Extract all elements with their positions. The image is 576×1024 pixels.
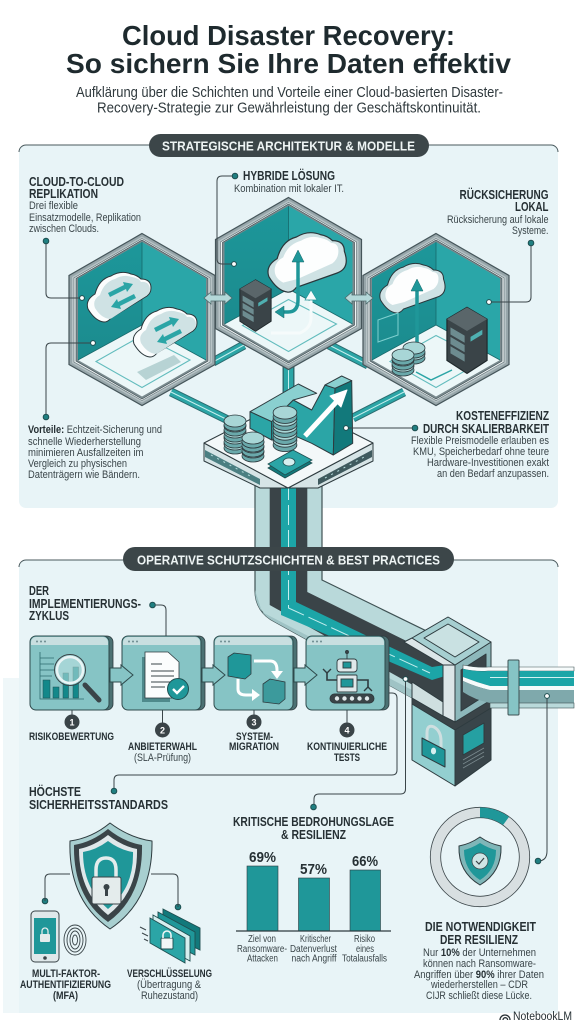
step number badges: 3 xyxy=(251,718,257,728)
heading: threat situation xyxy=(233,815,394,842)
step number badges xyxy=(64,714,354,738)
heading: threat situation: KRITISCHE BEDROHUNGSLAGE xyxy=(233,815,394,829)
bar chart: eines xyxy=(356,944,374,955)
data conduit pipe xyxy=(255,480,450,716)
junction box xyxy=(404,617,491,730)
text: advantages: Vergleich zu physischen xyxy=(28,458,127,470)
step 4: continuous tests robot xyxy=(306,636,389,710)
shield connector lines xyxy=(45,874,178,907)
text: hybrid: Kombination mit lokaler IT. xyxy=(234,183,344,195)
text: cost efficiency: Flexible Preismodelle erlauben es xyxy=(411,435,550,447)
title xyxy=(66,20,512,79)
bar chart: nach Angriff xyxy=(292,954,337,964)
step labels: SYSTEM- xyxy=(236,731,273,743)
heading: security standards xyxy=(29,784,168,812)
text: advantages: schnelle Wiederherstellung xyxy=(28,436,141,448)
subtitle xyxy=(76,85,503,116)
step labels: (SLA-Prüfung) xyxy=(134,752,191,764)
icon: small shield xyxy=(459,837,501,885)
subtitle: Recovery-Strategie zur Gewährleistung der Geschäftskontinuität. xyxy=(97,100,481,116)
text: cloud-to-cloud: Drei flexible xyxy=(29,200,78,212)
step labels: ANBIETERWAHL xyxy=(128,741,197,753)
text: cloud-to-cloud: zwischen Clouds. xyxy=(29,223,99,235)
section header: strategic xyxy=(149,134,429,157)
heading: threat situation: & RESILIENZ xyxy=(281,828,346,842)
text: need for resilience: DER RESILIENZ xyxy=(440,932,518,947)
heading: security standards: SICHERHEITSSTANDARDS xyxy=(29,798,168,812)
labels: MFA: (MFA) xyxy=(53,990,78,1002)
text: advantages xyxy=(28,424,162,481)
step labels: KONTINUIERLICHE xyxy=(307,741,387,753)
title: Cloud Disaster Recovery: xyxy=(122,20,455,51)
step arrows xyxy=(110,665,317,685)
bar chart: Datenverlust xyxy=(290,944,337,955)
donut chart 10 percent xyxy=(430,807,530,907)
scaling chart block xyxy=(250,376,353,455)
hexagon: hybrid xyxy=(216,198,362,370)
step number badges: 1 xyxy=(69,718,75,728)
section header: operative: OPERATIVE SCHUTZSCHICHTEN & BEST PRACTICES xyxy=(137,552,440,568)
heading: security standards: HÖCHSTE xyxy=(29,784,81,799)
text: cost efficiency: KOSTENEFFIZIENZ xyxy=(456,409,549,423)
text: cost efficiency: Hardware-Investitionen exakt xyxy=(427,457,549,469)
bar chart: Risiko xyxy=(354,934,375,945)
text: need for resilience: können nach Ransomware- xyxy=(423,958,536,970)
heading: implementation cycle xyxy=(29,584,141,623)
callout dots lower panel xyxy=(42,602,549,910)
connector beams to platform xyxy=(171,345,404,420)
callout lines upper panel xyxy=(46,176,531,428)
panel: operative protection xyxy=(19,560,558,1013)
step number badges: 4 xyxy=(344,726,350,736)
text: cloud-to-cloud: Einsatzmodelle, Replikation xyxy=(29,212,141,224)
panel: strategic architecture xyxy=(19,145,558,508)
hexagon: cloud-to-cloud xyxy=(69,234,215,406)
data stacks xyxy=(224,406,297,462)
bar chart xyxy=(236,849,391,964)
text: hybrid xyxy=(234,168,344,195)
hexagon: local restore xyxy=(363,234,509,406)
text: need for resilience: CIJR schließt diese Lücke. xyxy=(426,990,532,1002)
subtitle: Aufklärung über die Schichten und Vorteile einer Cloud-basierten Disaster- xyxy=(76,85,503,101)
text: cloud-to-cloud: CLOUD-TO-CLOUD xyxy=(29,175,124,189)
text: need for resilience: DIE NOTWENDIGKEIT xyxy=(425,919,536,934)
bar chart: 66% xyxy=(352,853,378,870)
panel border lines xyxy=(19,145,558,567)
icon: phone with fingerprint xyxy=(31,911,86,962)
text: cost efficiency: an den Bedarf anzupassen. xyxy=(437,468,549,480)
step number badges: 2 xyxy=(160,726,165,736)
title: So sichern Sie Ihre Daten effektiv xyxy=(66,48,512,79)
text: advantages: Datenträgern wie Bändern. xyxy=(28,469,140,481)
text: local restore: RÜCKSICHERUNG xyxy=(460,187,548,202)
step labels: MIGRATION xyxy=(229,741,279,753)
step 3: system migration xyxy=(214,636,297,710)
labels: encryption xyxy=(127,967,212,1002)
central platform xyxy=(204,400,373,488)
callout lines lower panel xyxy=(72,605,547,861)
text: hybrid: HYBRIDE LÖSUNG xyxy=(243,168,335,183)
text: advantages: Vorteile: Echtzeit-Sicherung und xyxy=(28,424,162,436)
step cards xyxy=(30,636,389,710)
text: need for resilience xyxy=(414,919,544,1002)
callout dots upper panel xyxy=(43,173,534,431)
step labels: RISIKOBEWERTUNG xyxy=(29,731,114,743)
step 1: risk assessment xyxy=(30,636,113,710)
step labels xyxy=(29,731,387,764)
lower server cabinet xyxy=(412,703,491,786)
icon: encrypted cards xyxy=(140,909,200,963)
step 2: provider selection xyxy=(122,636,205,710)
step labels: TESTS xyxy=(334,752,360,764)
soft left background strip xyxy=(3,678,20,1013)
labels: encryption: (Übertragung & xyxy=(137,979,202,991)
text: cloud-to-cloud: REPLIKATION xyxy=(29,187,98,201)
bar chart: Totalausfalls xyxy=(342,954,387,964)
labels: MFA: MULTI-FAKTOR- xyxy=(32,968,100,980)
text: local restore: Systeme. xyxy=(512,225,548,237)
labels: encryption: VERSCHLÜSSELUNG xyxy=(127,967,212,980)
money icon xyxy=(268,450,312,478)
text: need for resilience: wiederherstellen – CDR xyxy=(430,979,528,991)
text: advantages: minimieren Ausfallzeiten im xyxy=(28,447,144,459)
right outgoing pipe xyxy=(463,665,574,708)
text: cloud-to-cloud xyxy=(29,175,141,235)
text: cost efficiency: KMU, Speicherbedarf ohne teure xyxy=(413,446,549,458)
bar chart: Ransomware- xyxy=(237,944,287,955)
bar chart: Attacken xyxy=(247,954,278,964)
double arrows between hexagons xyxy=(204,292,373,304)
section header: operative xyxy=(123,547,454,571)
text: local restore: LOKAL xyxy=(515,200,549,214)
text: need for resilience: Angriffen über 90% ihrer Daten xyxy=(414,969,544,981)
bar chart: Ziel von xyxy=(248,934,276,945)
bar chart: Kritischer xyxy=(300,934,331,945)
labels: MFA xyxy=(20,968,111,1002)
section header: strategic: STRATEGISCHE ARCHITEKTUR & MODELLE xyxy=(162,138,415,154)
text: need for resilience: Nur 10% der Unternehmen xyxy=(423,947,536,959)
heading: implementation cycle: ZYKLUS xyxy=(29,609,69,623)
icon: security shield with lock xyxy=(70,823,152,929)
pipe collar xyxy=(508,660,519,715)
heading: implementation cycle: DER xyxy=(29,584,49,598)
labels: encryption: Ruhezustand) xyxy=(141,990,198,1002)
heading: implementation cycle: IMPLEMENTIERUNGS- xyxy=(29,597,141,611)
labels: MFA: AUTHENTIFIZIERUNG xyxy=(20,979,111,991)
text: local restore: Rücksicherung auf lokale xyxy=(447,214,548,226)
text: cost efficiency xyxy=(411,409,550,480)
bar chart: 57% xyxy=(300,861,327,878)
bar chart: 69% xyxy=(249,849,276,866)
text: local restore xyxy=(447,187,549,237)
